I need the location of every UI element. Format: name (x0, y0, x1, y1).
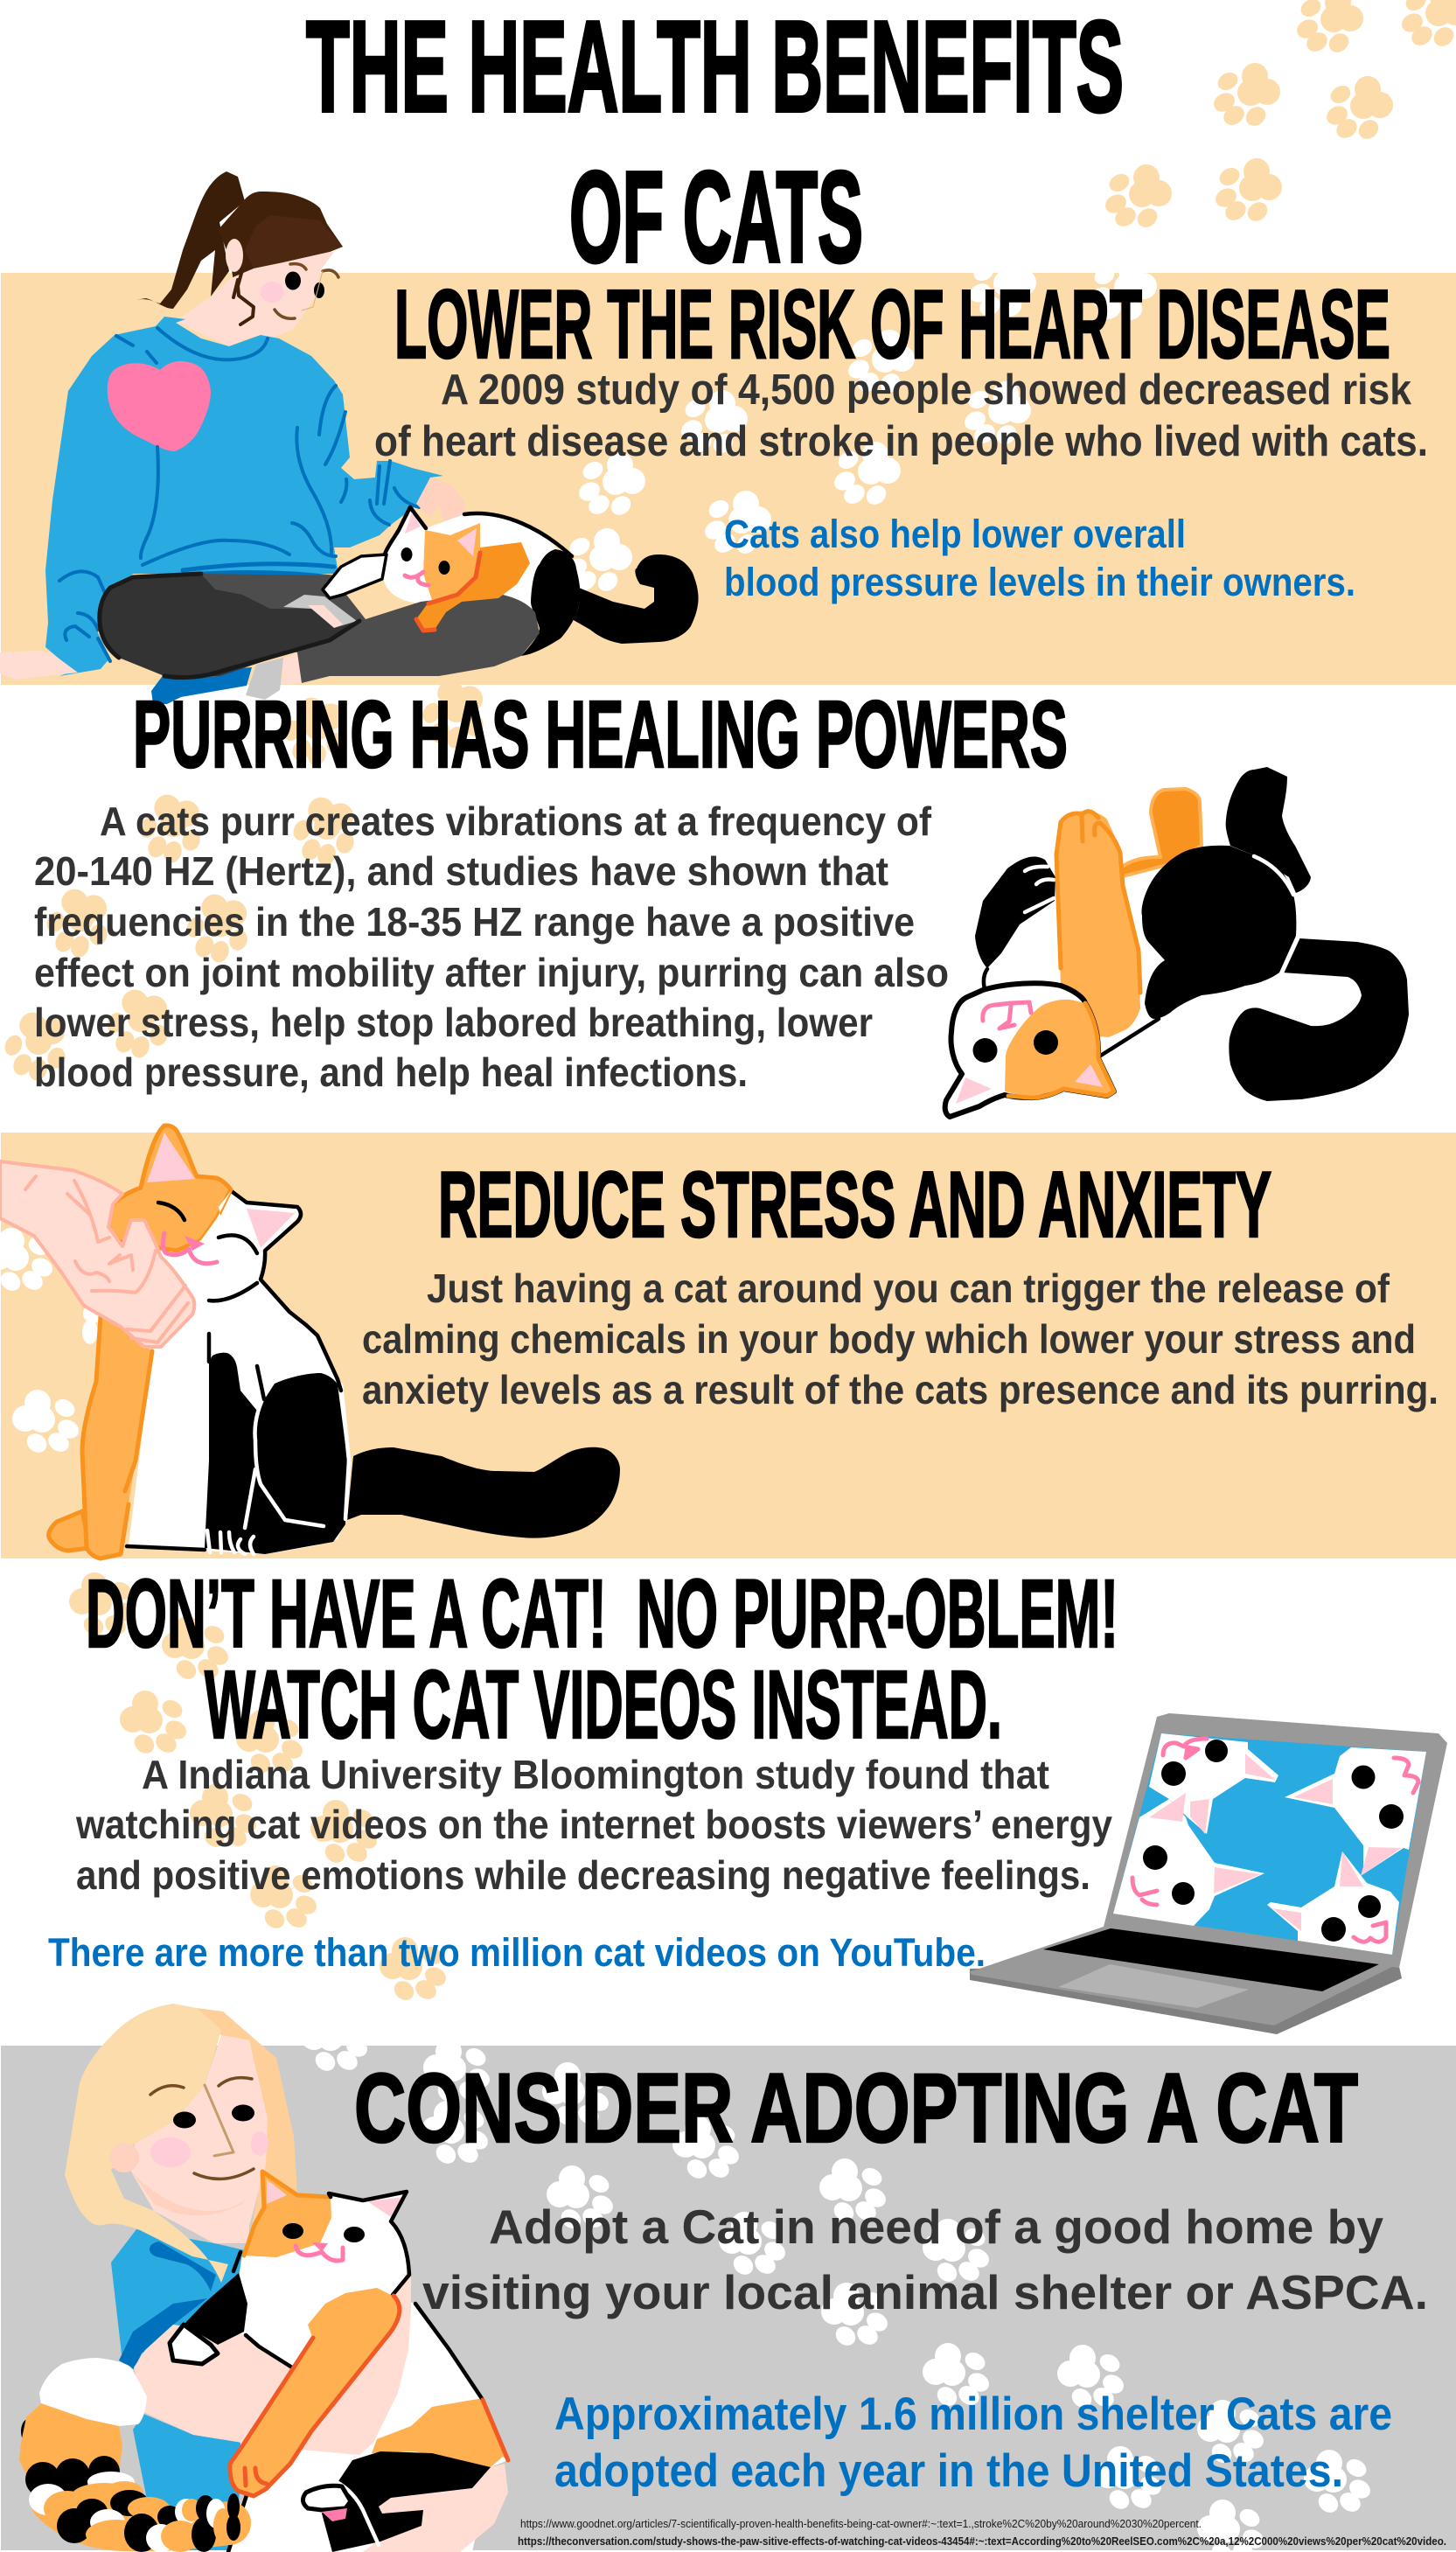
cat face (282, 2223, 365, 2261)
cat orange face patch (423, 523, 480, 600)
body text: 20-140 HZ (Hertz), and studies have shown that (34, 848, 888, 894)
hair (219, 192, 343, 296)
illustration: laptop with cat faces (969, 1713, 1447, 2034)
face features (150, 2078, 268, 2179)
cat outline (228, 2192, 483, 2552)
cat face (401, 547, 449, 585)
cat body (382, 507, 580, 631)
cat tail (572, 554, 699, 644)
blue callout: There are more than two million cat videos on YouTube. (48, 1930, 986, 1975)
orange arm (80, 1316, 152, 1558)
cat white body (227, 2192, 508, 2552)
body text: watching cat videos on the internet boosts viewers’ energy (75, 1802, 1112, 1847)
tail white tip (39, 2358, 147, 2426)
face and neck (131, 2035, 268, 2243)
cat ears inner (956, 1064, 1103, 1104)
cat outline (127, 1189, 341, 1550)
body text (34, 798, 949, 1095)
shirt bottom (133, 2414, 242, 2550)
header (306, 0, 1456, 289)
cat orange body patch (416, 542, 530, 631)
orange hind leg (1121, 789, 1202, 876)
shirt dark fold (119, 2242, 216, 2369)
woman arm skin (134, 2264, 411, 2455)
heart (108, 361, 211, 451)
blue foot (151, 667, 252, 704)
cat eyes (972, 1030, 1058, 1063)
blue callout: adopted each year in the United States. (554, 2445, 1343, 2497)
panel: reduce stress and anxiety (0, 1126, 1456, 1558)
body text: frequencies in the 18-35 HZ range have a positive (34, 899, 915, 945)
black front arm (975, 856, 1055, 968)
blue callout: Approximately 1.6 million shelter Cats are (554, 2388, 1392, 2440)
panel: lower the risk of heart disease (0, 171, 1456, 704)
sweater (45, 317, 443, 676)
sweater fold lines (59, 328, 419, 661)
cat tail (347, 1447, 620, 1538)
illustration: woman with heart sitting with cat (0, 171, 699, 704)
body text (374, 366, 1428, 465)
keyboard (1043, 1928, 1379, 1991)
screen cat faces (1113, 1733, 1426, 1955)
left hand (0, 651, 78, 680)
front leg (98, 574, 359, 676)
hand on cat (416, 478, 466, 528)
body text (362, 1266, 1439, 1412)
source links (518, 2517, 1446, 2548)
screen cat eyes (1143, 1740, 1404, 1942)
woman face and neck (176, 252, 334, 346)
blue callout (724, 512, 1355, 604)
laptop base side (970, 1959, 1402, 2034)
white cheek overlay (179, 1191, 231, 1266)
panel: cat videos (48, 1560, 1447, 2034)
ear (226, 239, 243, 272)
back leg (201, 574, 540, 683)
orange paw (49, 1511, 90, 1551)
cat ears (405, 512, 477, 556)
head white (945, 983, 1114, 1117)
body text: blood pressure, and help heal infections. (34, 1049, 748, 1095)
body text: lower stress, help stop labored breathing, lower (34, 1000, 873, 1045)
blue callout: Cats also help lower overall (724, 512, 1186, 556)
hind leg black (1226, 767, 1311, 893)
sock and ankle (246, 658, 283, 700)
blue callout (554, 2388, 1392, 2497)
heading (86, 1560, 1118, 1759)
laptop base (969, 1927, 1399, 2026)
ear (109, 2143, 139, 2172)
body text: Adopt a Cat in need of a good home by (489, 2200, 1383, 2254)
white haunch lines (207, 1384, 349, 1554)
right hair (197, 2008, 297, 2239)
orange cat arm (230, 2288, 400, 2496)
illustration: blonde woman hugging cat (19, 2004, 508, 2552)
front white paw (170, 2325, 218, 2364)
panel: purring has healing powers (0, 668, 1409, 1117)
ears pink (147, 1133, 295, 1248)
left hair (65, 2004, 228, 2283)
orange head (108, 1126, 231, 1251)
body text: Just having a cat around you can trigger the release of (427, 1266, 1390, 1311)
body black (1142, 846, 1296, 1019)
shirt top (111, 2229, 245, 2361)
laptop lid (1104, 1713, 1447, 1968)
cat black patch (521, 549, 581, 656)
tail (19, 2403, 240, 2552)
body text: effect on joint mobility after injury, purring can also (34, 950, 949, 995)
black front arm (184, 2273, 247, 2345)
orange front arm (1055, 811, 1140, 1037)
inner sock (283, 595, 357, 628)
black haunch (322, 2451, 491, 2552)
lower arm skin (363, 2464, 508, 2552)
source links: https://www.goodnet.org/articles/7-scientifically-proven-health-benefits-being-cat-owner#:~:text=1.,stroke%2C%20by%20around%2030%20percent. (520, 2517, 1202, 2530)
cat white body (122, 1189, 349, 1554)
tail (1229, 938, 1409, 1101)
hand wrinkles (25, 1176, 188, 1342)
body text (422, 2200, 1428, 2319)
hind paw (303, 2486, 351, 2510)
screen cat ears (1149, 1754, 1402, 1931)
body text: A cats purr creates vibrations at a frequency of (100, 798, 932, 844)
body text: and positive emotions while decreasing negative feelings. (76, 1852, 1090, 1898)
cat arm (323, 554, 387, 598)
trackpad (1058, 1964, 1249, 2008)
body text: A Indiana University Bloomington study found that (142, 1752, 1049, 1797)
cat black haunch (205, 1353, 347, 1554)
screen cat mouths (1132, 1739, 1418, 1942)
hand (0, 1161, 194, 1347)
orange head patch (244, 2172, 331, 2257)
woman face details (261, 264, 338, 318)
body text (75, 1752, 1112, 1898)
cat faces (158, 1203, 257, 1264)
illustration: cat on its back (945, 767, 1409, 1117)
orange back patch (372, 2398, 508, 2467)
blue callout: blood pressure levels in their owners. (724, 560, 1355, 604)
body text: visiting your local animal shelter or ASPCA. (422, 2265, 1428, 2319)
illustration: hand petting cat (0, 1126, 620, 1558)
cat mouth (983, 1002, 1031, 1028)
panel: consider adopting a cat (1, 2004, 1456, 2552)
orange face (1005, 1000, 1114, 1098)
title line 2: OF CATS (569, 145, 863, 289)
ears inner (267, 2179, 405, 2217)
ponytail (135, 171, 245, 309)
screen (1113, 1733, 1426, 1955)
